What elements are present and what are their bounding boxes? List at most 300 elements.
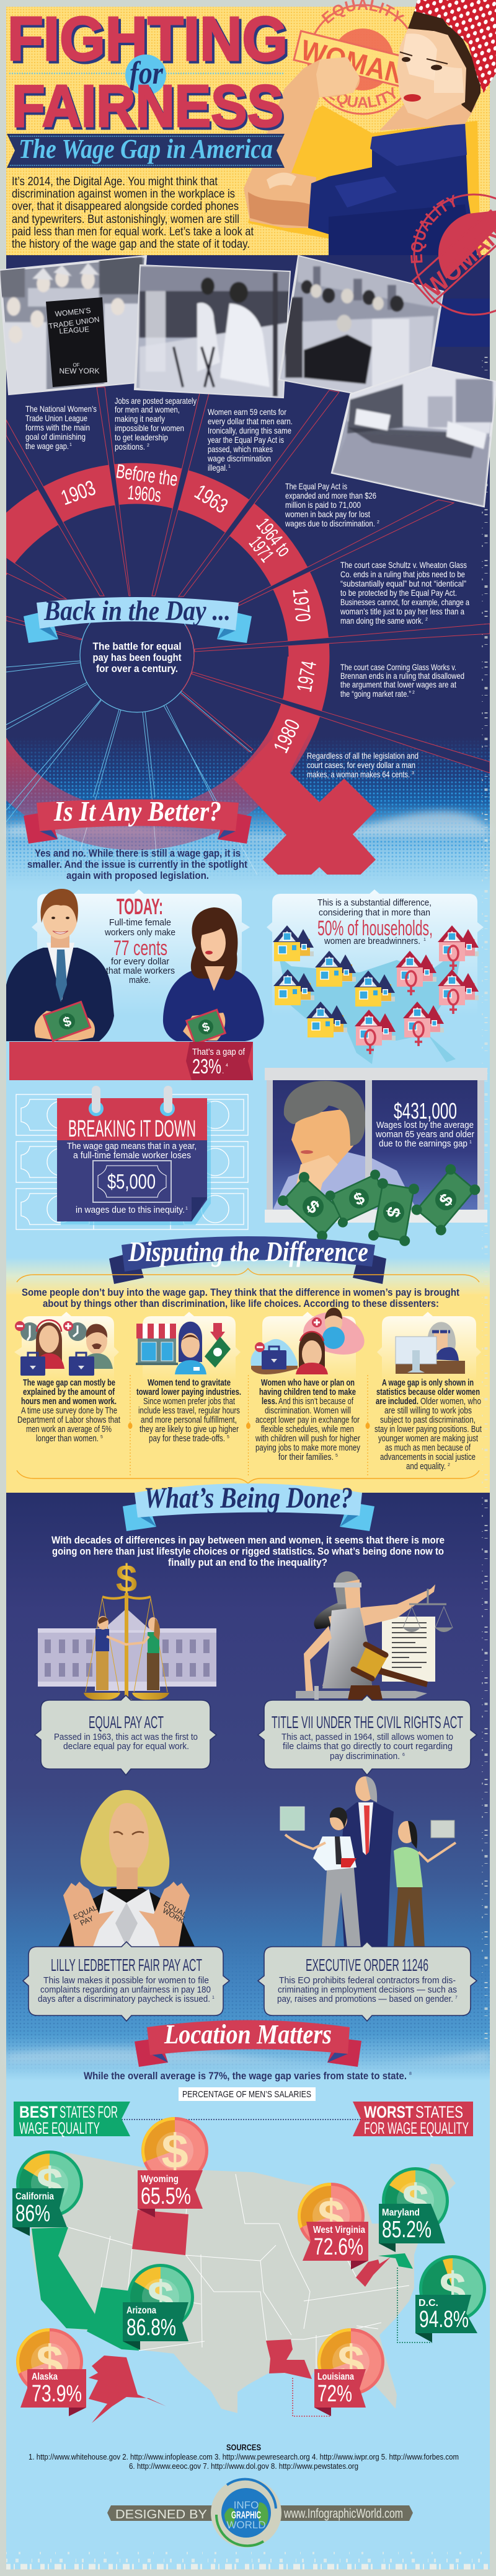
timeline: 1903 text: 1	[69, 443, 72, 447]
timeline: 1964 to 1971 text: wages due to discrimination.	[285, 518, 375, 528]
intro paragraph: discrimination against women in the workplace is	[12, 188, 235, 201]
panel: households map	[267, 889, 484, 1064]
marker: Wyoming: Wyoming	[141, 2174, 179, 2185]
amount box: $5,000: $5,000	[107, 1170, 156, 1193]
intro paragraph: It’s 2014, the Digital Age. You might think that	[12, 175, 218, 188]
marker: Arizona: Arizona	[126, 2305, 156, 2316]
timeline: 1974 text	[340, 662, 464, 699]
US map	[30, 2152, 456, 2423]
card: lilly ledbetter: days after a discriminatory paycheck is issued.	[38, 1994, 210, 2004]
photos	[0, 254, 496, 506]
text: 50 percent of households: 1	[423, 938, 426, 942]
timeline: before the 1960s text: positions.	[115, 442, 145, 452]
title: Fairness: FAIRNESS	[14, 76, 285, 142]
marker: D.C.: 94.8%	[419, 2307, 469, 2333]
text column 1: The wage gap can mostly be	[23, 1378, 115, 1388]
photo: Women's Trade Union League: OF	[73, 362, 80, 368]
text column 3: less.	[262, 1396, 277, 1407]
label: percentage of men's salaries	[179, 2087, 316, 2101]
label: worst states: STATES	[415, 2103, 463, 2121]
panel: equal pay act	[35, 1558, 216, 1775]
text column 4	[374, 1378, 482, 1472]
illustration: scales and capitol: $	[116, 1558, 137, 1600]
marker: D.C.	[415, 2255, 486, 2342]
state: California	[32, 2227, 95, 2329]
red band: gap of 23 percent: 23%	[192, 1055, 221, 1078]
heading banner: Back in the Day: Back in the Day ...	[43, 595, 231, 626]
panel: breaking it down	[16, 1086, 248, 1229]
year labels: 1963	[190, 480, 232, 518]
timeline: 1903 text: goal of diminishing	[25, 432, 86, 442]
dissenter column: children	[250, 1308, 365, 1462]
year labels: 1974	[293, 659, 321, 694]
marker: D.C.: D.C.	[418, 2298, 438, 2308]
card: title VII: This act, passed in 1964, still allows women to	[281, 1732, 453, 1742]
tag: designed by	[107, 2505, 212, 2521]
card: executive order	[258, 1942, 477, 2021]
timeline: 1963 text: Women earn 59 cents for	[208, 407, 286, 417]
marker: Alaska: Alaska	[32, 2372, 58, 2382]
text: 50 percent of households	[317, 897, 433, 946]
timeline: 1903 text: the wage gap.	[25, 441, 69, 451]
text column 4: are included.	[376, 1396, 418, 1407]
intro paragraph: and typewriters. But astonishingly, women are still	[12, 213, 239, 226]
title	[7, 4, 290, 168]
state borders	[68, 2174, 409, 2369]
card: executive order: This EO prohibits federal contractors from dis-	[279, 1975, 456, 1986]
text column 4: and equality.	[406, 1461, 446, 1472]
eyes and lips	[402, 57, 410, 62]
panel: lilly ledbetter	[23, 1790, 229, 2021]
tag: designed by: DESIGNED BY	[115, 2508, 207, 2521]
text: what's being done intro: With decades of differences in pay between men and women, it seems that there is more	[51, 1535, 445, 1546]
amount box: $5,000	[93, 1161, 171, 1202]
timeline: 1964 to 1971 text: The Equal Pay Act is	[285, 481, 347, 491]
photo: equality march	[332, 367, 496, 506]
illustration: Rosie the Riveter	[244, 0, 496, 347]
label: best states	[14, 2102, 130, 2137]
icon: woman with baby and briefcase	[250, 1308, 365, 1381]
yellow shadow	[248, 105, 480, 255]
icons: pink houses	[355, 925, 479, 1054]
stat text: 77 cents: make.	[129, 975, 151, 985]
fist	[316, 57, 360, 97]
card: title VII: file claims that go directly to court regarding	[283, 1741, 453, 1752]
text: 50 percent of households: This is a substantial difference,	[317, 897, 432, 908]
photo: Women's Trade Union League: LEAGUE	[59, 325, 89, 336]
illustration: man with dollar	[6, 889, 114, 1041]
text column 1: longer than women.	[36, 1433, 99, 1444]
text column 1: hours men and women work.	[21, 1396, 117, 1407]
timeline: 1903 text: Trade Union League	[25, 413, 87, 423]
intro paragraph	[12, 175, 254, 251]
card: executive order: 7	[455, 1996, 458, 2000]
card: lilly ledbetter: 1	[212, 1996, 215, 2000]
stamp: equality woman bottom	[410, 193, 496, 316]
text column 3: flexible schedules, while men	[261, 1424, 354, 1434]
timeline: before the 1960s text: for men and women,	[115, 404, 180, 414]
timeline: 1964 to 1971 text: expanded and more than $26	[285, 491, 376, 500]
text column 4: are still willing to work jobs	[384, 1405, 472, 1416]
timeline: 1970 text: to be protected by the Equal Pay Act.	[340, 588, 457, 598]
marker: West Virginia: West Virginia	[313, 2225, 365, 2235]
heading banner: Location Matters	[135, 2019, 361, 2067]
marker: Arizona: 86.8%	[126, 2315, 176, 2341]
illustration: scales and capitol	[38, 1558, 216, 1709]
sources	[29, 2442, 459, 2471]
text: overall average: 8	[409, 2072, 412, 2076]
timeline: 1974 text: 2	[412, 691, 415, 695]
subtitle banner: The Wage Gap in America	[19, 134, 273, 164]
card background	[267, 889, 484, 1016]
marker: Wyoming: 65.5%	[141, 2183, 191, 2209]
marker: Wyoming	[138, 2117, 208, 2217]
timeline: 1974 text: Brennan ends in a ruling that disallowed	[340, 671, 464, 681]
illustration: woman with raised hands: EQUAL	[162, 1899, 188, 1919]
card: equal pay act: Passed in 1963, this act was the first to	[54, 1732, 198, 1742]
card: title VII	[258, 1695, 477, 1775]
timeline: 1974 text: The court case Corning Glass Works v.	[340, 662, 456, 672]
timeline: 1970 text: 2	[425, 618, 428, 622]
marker: Louisiana: 72%	[317, 2381, 352, 2407]
text column 1: 5	[100, 1435, 103, 1439]
illustration: woman with raised hands: PAY	[79, 1914, 95, 1928]
heading: today: TODAY:	[117, 894, 163, 919]
timeline: before the 1960s text: 2	[147, 443, 149, 448]
timeline: 1980 text	[307, 751, 418, 779]
text: battle for equal pay: for over a century.	[96, 663, 178, 675]
text: dissenters intro	[22, 1286, 459, 1309]
heading banner: What's Being Done: What’s Being Done?	[144, 1482, 353, 1514]
timeline: 1980 text: 3	[412, 771, 414, 775]
card: title VII: 6	[402, 1753, 405, 1757]
stamp: equality woman top	[293, 0, 409, 115]
card: executive order: criminating in employment decisions — such as	[278, 1984, 457, 1995]
marker: West Virginia	[298, 2183, 368, 2269]
dissenter column: lower paying industries	[136, 1312, 241, 1444]
illustration: woman with dollar: $	[200, 1020, 211, 1035]
text column 4: 2	[448, 1463, 450, 1467]
text: yes and no: Yes and no. While there is still a wage gap, it is	[35, 847, 241, 859]
illustration: lady justice	[296, 1571, 453, 1701]
tag: website: www.InfographicWorld.com	[283, 2507, 403, 2521]
stat text: 77 cents: that male workers	[106, 966, 175, 976]
logo: infographic world: WORLD	[226, 2519, 266, 2531]
year labels: 1970	[288, 587, 315, 623]
label: best states: WAGE EQUALITY	[19, 2119, 100, 2137]
window panes	[267, 1080, 484, 1210]
background bills	[16, 1094, 248, 1229]
year labels: 1903	[58, 476, 99, 510]
timeline: 1963 text: every dollar that men earn.	[208, 416, 293, 426]
timeline: 1903 text	[25, 404, 97, 451]
marker: D.C.: $	[439, 2262, 466, 2316]
timeline: 1970 text: man doing the same work.	[340, 616, 423, 626]
state: Wyoming	[132, 2210, 188, 2255]
arm	[244, 59, 360, 228]
dissenter column: hours worked	[14, 1312, 121, 1444]
lower blue spokes	[6, 660, 257, 875]
dotted connector	[122, 2119, 361, 2120]
illustration: woman with raised hands: EQUAL	[72, 1903, 99, 1921]
red ring	[0, 483, 309, 830]
label: best states: STATES FOR	[60, 2103, 118, 2121]
state: Maryland	[378, 2253, 413, 2269]
panel: today comparison	[6, 889, 264, 1080]
text column 1	[17, 1378, 121, 1444]
heading banner: What's Being Done	[123, 1482, 374, 1531]
center hub	[79, 623, 195, 713]
red band: gap of 23 percent	[9, 1042, 253, 1080]
text: yes and no: again with proposed legislation.	[66, 870, 209, 881]
panel: window and older woman	[265, 1068, 487, 1247]
text: battle for equal pay: pay has been fought	[93, 652, 182, 663]
intro paragraph: over, that it disappeared alongside corded phones	[12, 200, 239, 213]
stat text: 77 cents	[104, 917, 175, 985]
card: lilly ledbetter: This law makes it possible for women to file	[43, 1975, 209, 1986]
ribbon tail	[234, 657, 376, 891]
year labels: 1980	[269, 715, 305, 756]
icon: older woman at computer	[377, 1312, 481, 1381]
label: percentage of men's salaries: PERCENTAGE OF MEN’S SALARIES	[182, 2089, 311, 2100]
text column 3: with children will push for higher	[255, 1433, 360, 1444]
text column 3: discrimination. Women will	[265, 1405, 351, 1416]
text: what's being done intro: finally put an end to the inequality?	[168, 1557, 327, 1568]
timeline: before the 1960s text	[115, 396, 197, 452]
timeline: 1970 text: woman’s title just to pay her less than a	[340, 606, 464, 616]
marker: Louisiana	[314, 2328, 384, 2416]
logo: infographic world: GRAPHIC	[231, 2509, 261, 2521]
marker: Arizona	[123, 2264, 194, 2350]
red band: gap of 23 percent: 4	[226, 1063, 228, 1068]
text column 3: for their families.	[278, 1452, 334, 1462]
title: Fairness: FAIRNESS	[12, 73, 283, 139]
heading banner: Is It Any Better	[24, 795, 252, 844]
text column 3	[255, 1378, 360, 1462]
dissenter column: older women	[374, 1312, 482, 1472]
text: overall average: While the overall average is 77%, the wage gap varies from state to state.	[84, 2071, 407, 2082]
timeline: 1903 text: The National Women’s	[25, 404, 97, 414]
title: for: for	[130, 56, 164, 91]
calendar page: 1	[185, 1207, 188, 1211]
card: equal pay act: declare equal pay for equal work.	[63, 1741, 189, 1752]
card: lilly ledbetter: LILLY LEDBETTER FAIR PAY ACT	[51, 1955, 202, 1975]
stat: wages lost: $431,000	[394, 1098, 457, 1124]
year labels: 1964 to	[252, 514, 296, 561]
text column 2: include less travel, regular hours	[138, 1405, 240, 1416]
text column 2: Women tend to gravitate	[148, 1378, 231, 1388]
state: Louisiana	[266, 2339, 312, 2379]
text column 1: men work an average of 5%	[26, 1424, 112, 1434]
stat text: 77 cents: Full-time female	[109, 917, 171, 928]
illustration: woman with dollar	[163, 907, 264, 1044]
stat: wages lost: 1	[469, 1140, 472, 1145]
panel: executive order	[258, 1776, 477, 2021]
stat: wages lost: woman 65 years and older	[375, 1129, 474, 1140]
timeline: 1970 text: “substantially equal” but not “identical”	[340, 579, 466, 588]
timeline: 1980 text: court cases, for every dollar a man	[307, 760, 415, 770]
label: best states: BEST	[19, 2103, 58, 2121]
marker: Louisiana: Louisiana	[317, 2372, 354, 2382]
text column 3: 5	[335, 1454, 338, 1458]
neck and face	[379, 74, 476, 131]
text: battle for equal pay	[93, 640, 182, 675]
year labels: Before the	[115, 460, 179, 491]
timeline: 1903 text: forms with the main	[25, 422, 90, 432]
timeline: 1963 text: year the Equal Pay Act is	[208, 435, 284, 445]
marker: West Virginia: 72.6%	[314, 2234, 363, 2260]
timeline: 1980 text: makes, a woman makes 64 cents.	[307, 769, 410, 779]
marker: Maryland	[379, 2167, 449, 2252]
marker: California: 86%	[16, 2201, 50, 2227]
stamp: equality woman bottom: EQUALITY	[410, 194, 455, 263]
panel: title VII	[258, 1571, 477, 1775]
timeline: 1974 text: the argument that lower wages are at	[340, 679, 456, 689]
footer: designed by	[107, 2478, 413, 2548]
marker: Alaska	[16, 2328, 86, 2416]
text column 3: having children tend to make	[259, 1387, 356, 1397]
text: what's being done intro	[51, 1535, 445, 1568]
stat: wages lost	[375, 1098, 474, 1149]
calendar page: The wage gap means that in a year,	[67, 1141, 197, 1151]
state: Alaska	[89, 2356, 166, 2423]
timeline: before the 1960s text: making it nearly	[115, 414, 165, 424]
text column 1: A time use survey done by The	[21, 1405, 117, 1416]
photo: Women's Trade Union League	[0, 256, 146, 396]
photo: Women's Trade Union League: TRADE UNION	[48, 315, 100, 331]
logo: infographic world: INFO	[234, 2499, 259, 2511]
window frame	[265, 1068, 487, 1080]
card: equal pay act	[35, 1695, 216, 1775]
heading banner: Back in the Day	[24, 595, 252, 643]
photo: switchboard operators	[135, 266, 291, 399]
timeline: 1963 text: Ironically, during this same	[208, 426, 291, 435]
text: 50 percent of households: considering that in more than	[319, 907, 430, 918]
bracket: bottom	[17, 1470, 479, 1483]
text column 2: and more personal fulfillment,	[141, 1415, 237, 1425]
sources: 6. http://www.eeoc.gov 7. http://www.dol.gov 8. http://www.pewstates.org	[129, 2461, 358, 2471]
timeline: 1970 text: Co. ends in a ruling that jobs need to be	[340, 569, 465, 579]
marker: California	[12, 2150, 83, 2236]
red band: gap of 23 percent: That’s a gap of	[192, 1047, 246, 1057]
heading banner: Disputing the Difference: Disputing the Difference	[128, 1236, 368, 1267]
marker: Alaska: 73.9%	[32, 2381, 82, 2407]
timeline: 1970 text: The court case Schultz v. Wheaton Glass	[340, 560, 467, 570]
timeline: before the 1960s text: Jobs are posted separately	[115, 396, 197, 406]
timeline wheel	[0, 387, 490, 892]
timeline: 1964 to 1971 text: women in back pay for lost	[285, 509, 370, 519]
title: Fighting: FIGHTING	[7, 4, 288, 74]
marker: Maryland: Maryland	[382, 2207, 420, 2218]
icons: falling bills	[275, 1162, 482, 1247]
intro paragraph: paid less than men for equal work. Let’s take a look at	[12, 225, 254, 238]
text: dissenters intro: about by things other than discrimination, like life choices. According to these dissenters:	[43, 1298, 439, 1309]
dotted rule	[9, 73, 284, 74]
text: 50 percent of households: women are breadwinners.	[324, 936, 420, 946]
card: lilly ledbetter	[23, 1942, 229, 2021]
year labels	[58, 460, 321, 756]
bracket: top	[17, 1268, 479, 1282]
timeline: 1963 text	[207, 407, 293, 473]
photo: Women's Trade Union League: NEW YORK	[59, 367, 100, 375]
sources: SOURCES	[226, 2442, 261, 2452]
spoke gaps	[6, 387, 490, 773]
state: West Virginia	[356, 2257, 391, 2287]
icons: yellow houses	[273, 925, 395, 1037]
calendar page: a full-time female worker loses	[73, 1150, 191, 1161]
text column 3: accept lower pay in exchange for	[255, 1415, 360, 1425]
timeline: before the 1960s text: to get leadership	[115, 432, 168, 442]
timeline: 1963 text: passed, which makes	[208, 444, 273, 454]
icon: store, worker and money	[136, 1312, 241, 1381]
text column 2: Since women prefer jobs that	[143, 1396, 236, 1407]
text: yes and no	[27, 847, 247, 881]
stamp: equality woman top: EQUALITY	[328, 87, 396, 108]
text column 2: they are likely to give up higher	[140, 1424, 239, 1434]
card background	[32, 889, 250, 1016]
timeline: 1963 text: illegal.	[208, 463, 228, 473]
text column 3: Women who have or plan on	[261, 1378, 355, 1388]
year labels: 1960s	[126, 481, 162, 506]
text column 2: pay for these trade-offs.	[149, 1433, 225, 1444]
text: battle for equal pay: The battle for equal	[93, 640, 181, 652]
timeline: 1970 text	[340, 560, 469, 626]
icon: woman and man with clocks and briefcases	[14, 1312, 119, 1381]
label: worst states	[353, 2102, 473, 2137]
calendar page: BREAKING IT DOWN	[68, 1116, 196, 1142]
card: executive order: pay, raises and promotions — based on gender.	[277, 1994, 453, 2004]
stat text: 77 cents: 77 cents	[113, 937, 167, 960]
dividers	[128, 1375, 370, 1475]
timeline: 1964 to 1971 text	[285, 481, 379, 528]
text column 2: 5	[227, 1435, 229, 1439]
stat: wages lost: due to the earnings gap	[379, 1138, 467, 1149]
red band: gap of 23 percent: .	[222, 1067, 224, 1075]
timeline: 1963 text: 1	[228, 465, 231, 469]
text column 3: And this isn’t because of	[278, 1396, 354, 1407]
timeline: 1964 to 1971 text: 2	[377, 520, 379, 525]
stat: wages lost: Wages lost by the average	[376, 1120, 474, 1130]
calendar page	[57, 1086, 211, 1225]
text column 2	[136, 1378, 241, 1444]
timeline: before the 1960s text: impossible for women	[115, 423, 184, 433]
stat text: 77 cents: workers only make	[104, 927, 175, 938]
text column 4: Older women, who	[420, 1396, 481, 1407]
timeline: 1980 text: Regardless of all the legislation and	[307, 751, 418, 761]
state: Arizona	[87, 2287, 139, 2351]
timeline: 1974 text: the “going market rate.”	[340, 689, 411, 699]
intro paragraph: the history of the wage gap and the state of it today.	[12, 238, 250, 251]
heading banner: Is It Any Better: Is It Any Better?	[53, 795, 221, 827]
US map silhouette	[279, 948, 462, 1064]
text column 1: explained by the amount of	[23, 1387, 115, 1397]
illustration: woman with raised hands	[58, 1790, 195, 1947]
card: lilly ledbetter: complaints regarding an unfairness in pay 180	[40, 1984, 211, 1995]
calendar page: in wages due to this inequity.	[76, 1205, 185, 1215]
illustration: man with dollar: $	[61, 1013, 73, 1030]
timeline: 1964 to 1971 text: million is paid to 71,000	[285, 500, 361, 510]
text: yes and no: smaller. And the issue is currently in the spotlight	[27, 858, 247, 870]
shirt	[299, 123, 490, 347]
text column 1: Department of Labor shows that	[17, 1415, 121, 1425]
timeline: 1963 text: wage discrimination	[207, 453, 271, 463]
marker: California: California	[16, 2191, 54, 2202]
stat text: 77 cents: for every dollar	[111, 956, 169, 967]
card: title VII: pay discrimination.	[330, 1751, 400, 1762]
illustration: older woman	[273, 1081, 417, 1210]
card: equal pay act: EQUAL PAY ACT	[89, 1713, 164, 1732]
text: what's being done intro: going on here than just lifestyle choices or rigged statistics. So what’s being done now to	[52, 1546, 444, 1557]
